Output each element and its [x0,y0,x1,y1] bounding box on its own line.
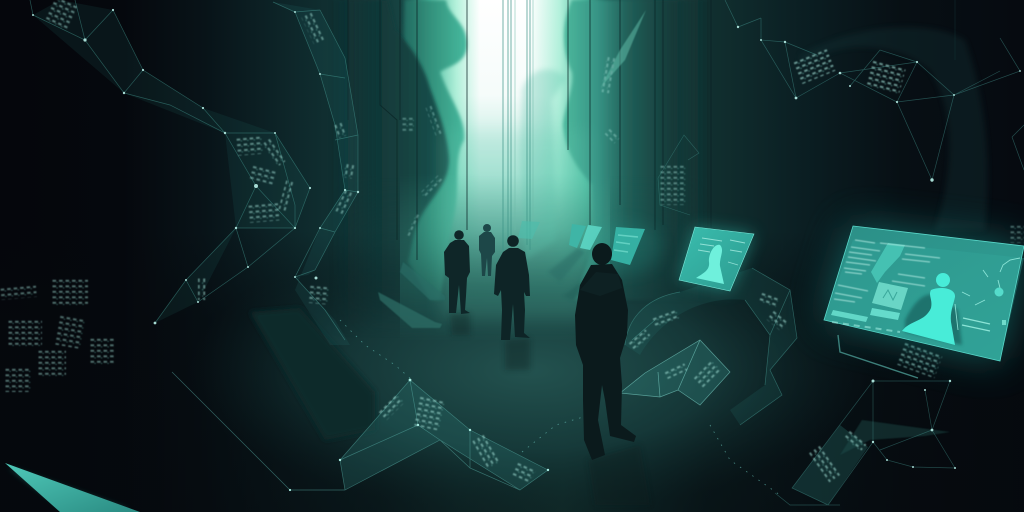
network dots [955,258,1020,331]
far right chips [1010,225,1024,243]
mid holographic screen [679,227,754,291]
map blob [871,243,905,283]
inset chart [872,282,908,310]
glow behind large screen [824,226,1024,361]
data on near pillar [402,105,443,237]
screen glow wash [594,222,662,274]
mesh ribbon: lower right [775,335,956,505]
glow behind mid screen [679,227,754,291]
pillar: far left teal [400,0,467,300]
figure: far person [479,224,495,276]
mesh ribbon: bottom centre [172,372,549,491]
figure: centre person [494,235,530,340]
mesh ring: right of main figure [522,268,797,495]
person silhouette [902,273,955,345]
large holographic screen [824,226,1024,361]
figure: left person [444,230,470,314]
mesh ribbon: upper left [30,0,311,324]
mesh ribbon: upper right [600,0,1024,230]
pillar: near left dark [400,38,451,300]
text lines left [834,240,940,302]
pillar: right wall [561,0,652,300]
soft light wash over the pillars [440,130,590,320]
icon: bright wedge bottom left [5,463,140,512]
inset bars [831,310,868,322]
vertical cables [348,0,955,260]
mesh ribbon: left column [273,2,412,380]
pillars in the corridor [400,0,652,300]
figure: foreground person [575,243,636,460]
small far screens [518,221,645,265]
central light shaft [400,0,610,340]
dark halo behind person [905,294,962,345]
figure shadows [450,313,650,505]
data clusters: far left [0,279,114,392]
floor ramps and blocks [250,248,950,455]
far silhouette in light [520,69,566,260]
